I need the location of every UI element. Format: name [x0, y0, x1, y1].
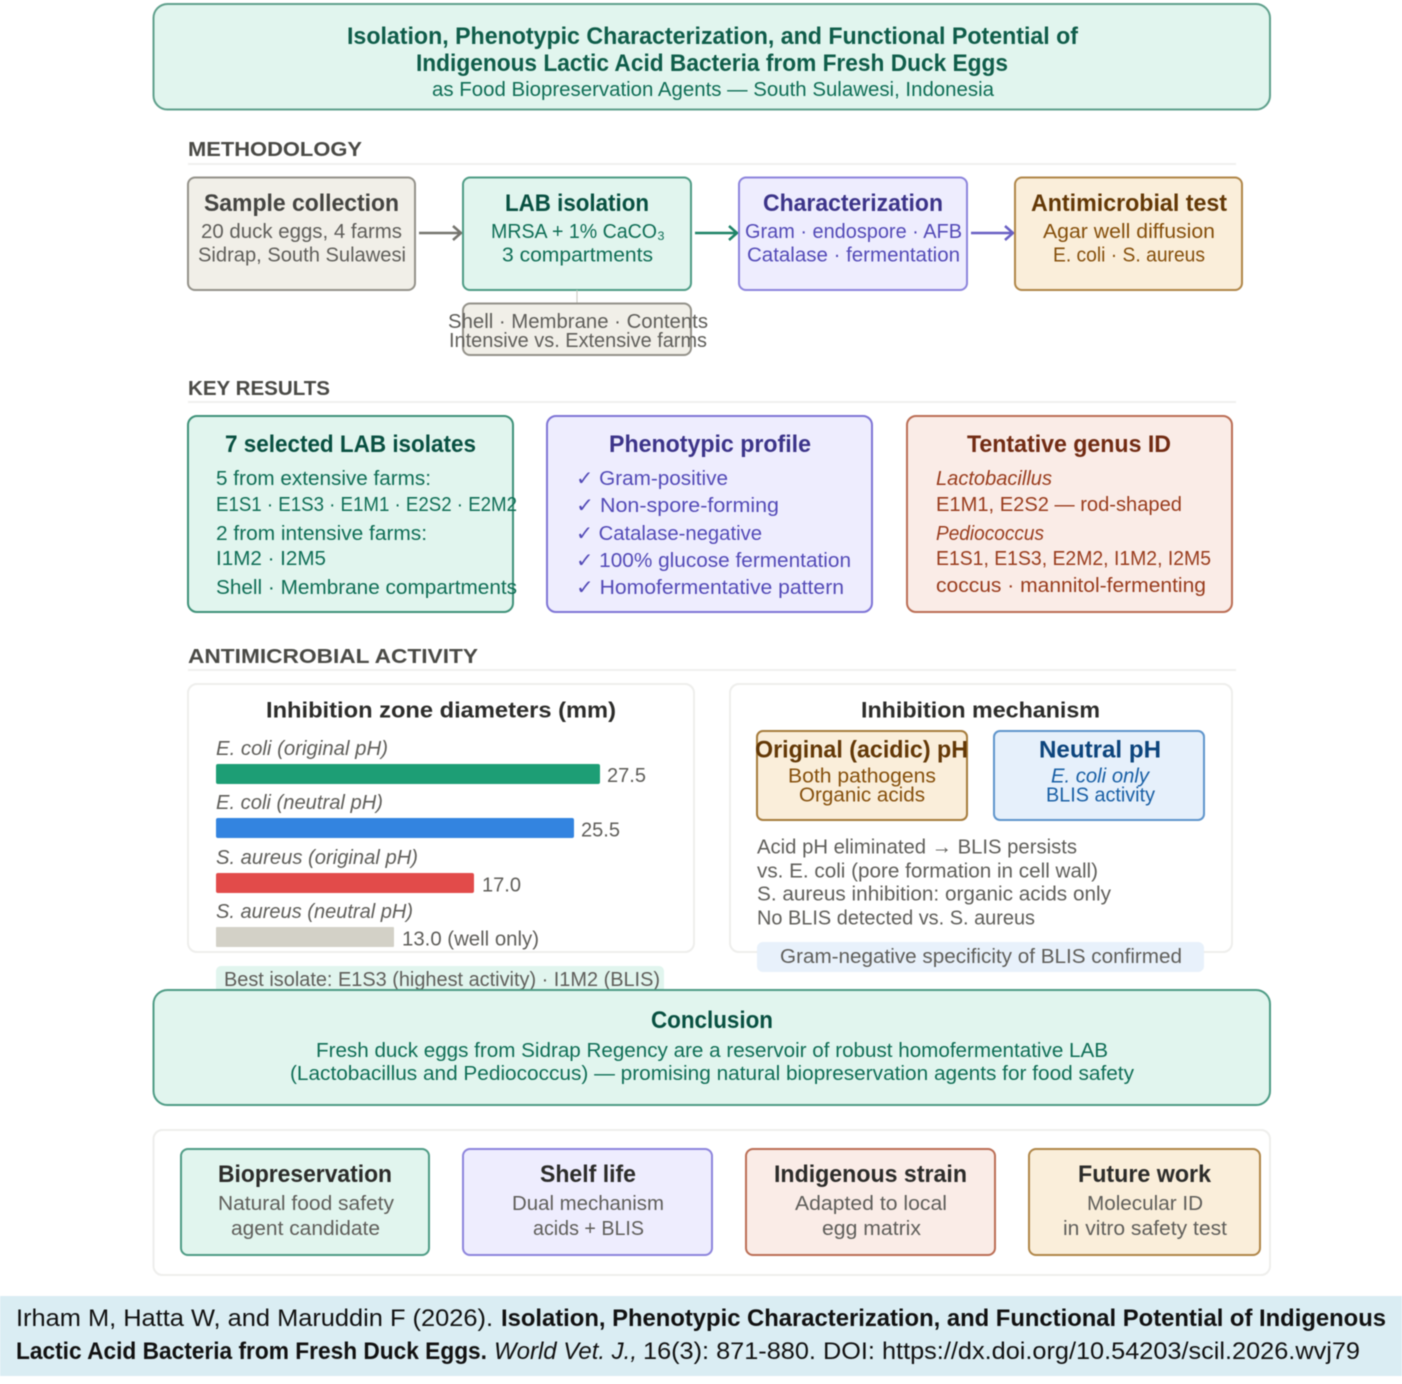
step: antimicrobial test: E. coli · S. aureus — [1053, 244, 1205, 266]
callout: gram-negative specificity — [757, 942, 1204, 972]
box: neutral pH — [994, 731, 1204, 820]
title banner: as Food Biopreservation Agents — South Sulawesi, Indonesia — [432, 79, 995, 101]
bar: S. aureus original pH: S. aureus (original pH) — [216, 847, 418, 869]
card: biopreservation — [181, 1149, 429, 1255]
card: future work: in vitro safety test — [1063, 1218, 1227, 1240]
card: indigenous strain: Adapted to local — [795, 1193, 947, 1215]
card: biopreservation: agent candidate — [231, 1218, 380, 1240]
step: characterization: Characterization — [763, 190, 943, 217]
panel: phenotypic profile: ✓ Homofermentative pattern — [576, 577, 844, 599]
panel: conclusion — [154, 990, 1270, 1105]
card: shelf life: Dual mechanism — [512, 1193, 664, 1215]
callout: gram-negative specificity: Gram-negative specificity of BLIS confirmed — [780, 946, 1182, 968]
step: antimicrobial test: Agar well diffusion — [1043, 221, 1215, 243]
step: LAB isolation: 3 compartments — [502, 244, 653, 266]
mechanism notes: S. aureus inhibition: organic acids only — [757, 884, 1111, 906]
step: LAB isolation: LAB isolation — [505, 190, 649, 217]
step: characterization: Catalase · fermentation — [747, 244, 960, 266]
methodology flow — [188, 178, 1242, 355]
card: indigenous strain — [746, 1149, 995, 1255]
mechanism notes: vs. E. coli (pore formation in cell wall) — [757, 860, 1098, 882]
panel: phenotypic profile: Phenotypic profile — [609, 431, 811, 458]
panel: selected isolates: E1S1 · E1S3 · E1M1 · E2S2 · E2M2 — [216, 494, 517, 516]
card: shelf life: Shelf life — [540, 1161, 636, 1188]
bar: S. aureus original pH — [216, 847, 521, 896]
card: biopreservation: Natural food safety — [218, 1193, 394, 1215]
bar: E. coli neutral pH — [216, 792, 620, 842]
step: sample collection: 20 duck eggs, 4 farms — [201, 221, 402, 243]
step: LAB isolation — [463, 178, 691, 290]
bar: E. coli original pH — [216, 738, 646, 787]
card: indigenous strain: egg matrix — [822, 1218, 921, 1240]
step: antimicrobial test — [1015, 178, 1242, 290]
arrow: characterization to antimicrobial test — [971, 226, 1013, 240]
step: LAB isolation: MRSA + 1% CaCO₃ — [491, 221, 665, 243]
box: original acidic pH: Both pathogens — [788, 766, 936, 788]
citation bar: Irham M, Hatta W, and Maruddin F (2026). — [16, 1305, 493, 1332]
box: original acidic pH: Organic acids — [799, 784, 925, 806]
panel: tentative genus ID: Tentative genus ID — [967, 431, 1171, 458]
callout: best isolate: Best isolate: E1S3 (highest activity) · I1M2 (BLIS) — [224, 969, 660, 991]
panel: selected isolates: 2 from intensive farms: — [216, 523, 427, 545]
panel: selected isolates — [188, 416, 517, 612]
heading: antimicrobial activity: ANTIMICROBIAL ACTIVITY — [188, 646, 479, 668]
heading: methodology: METHODOLOGY — [188, 139, 363, 161]
bar: E. coli neutral pH: E. coli (neutral pH) — [216, 792, 383, 814]
sub-step: compartments and farms: Intensive vs. Extensive farms — [449, 330, 707, 352]
arrow: isolation to characterization — [695, 226, 737, 240]
panel: tentative genus ID: coccus · mannitol-fermenting — [936, 575, 1206, 597]
box: neutral pH: Neutral pH — [1039, 736, 1161, 764]
citation bar: Lactic Acid Bacteria from Fresh Duck Eggs. — [16, 1338, 487, 1365]
card: future work — [1029, 1149, 1260, 1255]
panel: phenotypic profile: ✓ Non-spore-forming — [576, 495, 779, 517]
card: future work: Molecular ID — [1087, 1193, 1203, 1215]
panel: phenotypic profile: ✓ Gram-positive — [576, 468, 728, 490]
mechanism notes — [757, 836, 1111, 930]
step: antimicrobial test: Antimicrobial test — [1031, 190, 1227, 217]
step: characterization: Gram · endospore · AFB — [745, 221, 962, 243]
mechanism notes: No BLIS detected vs. S. aureus — [757, 908, 1035, 930]
card: indigenous strain: Indigenous strain — [774, 1161, 967, 1188]
bar: S. aureus neutral pH: S. aureus (neutral pH) — [216, 901, 413, 923]
panel: conclusion: (Lactobacillus and Pediococcus) — promising natural biopreservation agents for food safety — [290, 1063, 1134, 1085]
bar: S. aureus neutral pH — [216, 901, 539, 950]
sub-step: compartments and farms — [448, 290, 708, 355]
panel: phenotypic profile: ✓ 100% glucose fermentation — [576, 550, 851, 572]
step: characterization — [739, 178, 967, 290]
citation bar: 16(3): 871-880. DOI: https://dx.doi.org/10.54203/scil.2026.wvj79 — [643, 1338, 1360, 1365]
bar: S. aureus original pH: 17.0 — [482, 874, 521, 896]
citation bar: World Vet. J., — [494, 1338, 637, 1365]
panel: tentative genus ID: Pediococcus — [936, 523, 1044, 545]
box: original acidic pH — [755, 731, 968, 820]
bar: E. coli original pH: E. coli (original pH) — [216, 738, 388, 760]
citation bar — [0, 1296, 1402, 1376]
box: neutral pH: E. coli only — [1051, 766, 1150, 788]
step: sample collection: Sample collection — [204, 190, 399, 217]
panel: inhibition zone bar chart: Inhibition zone diameters (mm) — [266, 698, 616, 722]
bar: S. aureus neutral pH: 13.0 (well only) — [402, 928, 539, 950]
sub-step: compartments and farms: Shell · Membrane · Contents — [448, 311, 708, 333]
citation bar: Isolation, Phenotypic Characterization, and Functional Potential of Indigenous — [501, 1305, 1386, 1332]
panel: inhibition mechanism — [730, 684, 1232, 952]
card: future work: Future work — [1078, 1161, 1212, 1188]
panel: conclusion: Fresh duck eggs from Sidrap Regency are a reservoir of robust homofermentative LAB — [316, 1040, 1108, 1062]
panel: tentative genus ID — [907, 416, 1232, 612]
panel: selected isolates: I1M2 · I2M5 — [216, 548, 326, 570]
panel: selected isolates: 7 selected LAB isolates — [225, 431, 476, 458]
title banner: Indigenous Lactic Acid Bacteria from Fresh Duck Eggs — [416, 50, 1008, 77]
step: sample collection — [188, 178, 415, 290]
panel: implications — [154, 1130, 1270, 1275]
bar: E. coli original pH: 27.5 — [607, 765, 646, 787]
bar: E. coli neutral pH: 25.5 — [581, 820, 620, 842]
card: shelf life — [463, 1149, 712, 1255]
panel: selected isolates: Shell · Membrane compartments — [216, 577, 517, 599]
heading: key results: KEY RESULTS — [188, 378, 330, 400]
card: biopreservation: Biopreservation — [218, 1161, 392, 1188]
arrow: sample to isolation — [419, 226, 461, 240]
panel: tentative genus ID: E1S1, E1S3, E2M2, I1M2, I2M5 — [936, 548, 1211, 570]
panel: phenotypic profile: ✓ Catalase-negative — [576, 523, 762, 545]
title banner: Isolation, Phenotypic Characterization, and Functional Potential of — [347, 23, 1079, 50]
panel: selected isolates: 5 from extensive farms: — [216, 468, 431, 490]
panel: inhibition zone bar chart — [188, 684, 694, 952]
box: original acidic pH: Original (acidic) pH — [755, 736, 968, 764]
panel: tentative genus ID: E1M1, E2S2 — rod-shaped — [936, 494, 1182, 516]
title banner — [154, 4, 1270, 110]
panel: tentative genus ID: Lactobacillus — [936, 468, 1052, 490]
mechanism notes: Acid pH eliminated → BLIS persists — [757, 836, 1077, 858]
panel: phenotypic profile — [547, 416, 872, 612]
step: sample collection: Sidrap, South Sulawesi — [198, 244, 406, 266]
panel: conclusion: Conclusion — [651, 1007, 773, 1034]
card: shelf life: acids + BLIS — [533, 1218, 644, 1240]
box: neutral pH: BLIS activity — [1046, 784, 1155, 806]
panel: inhibition mechanism: Inhibition mechanism — [861, 698, 1100, 722]
